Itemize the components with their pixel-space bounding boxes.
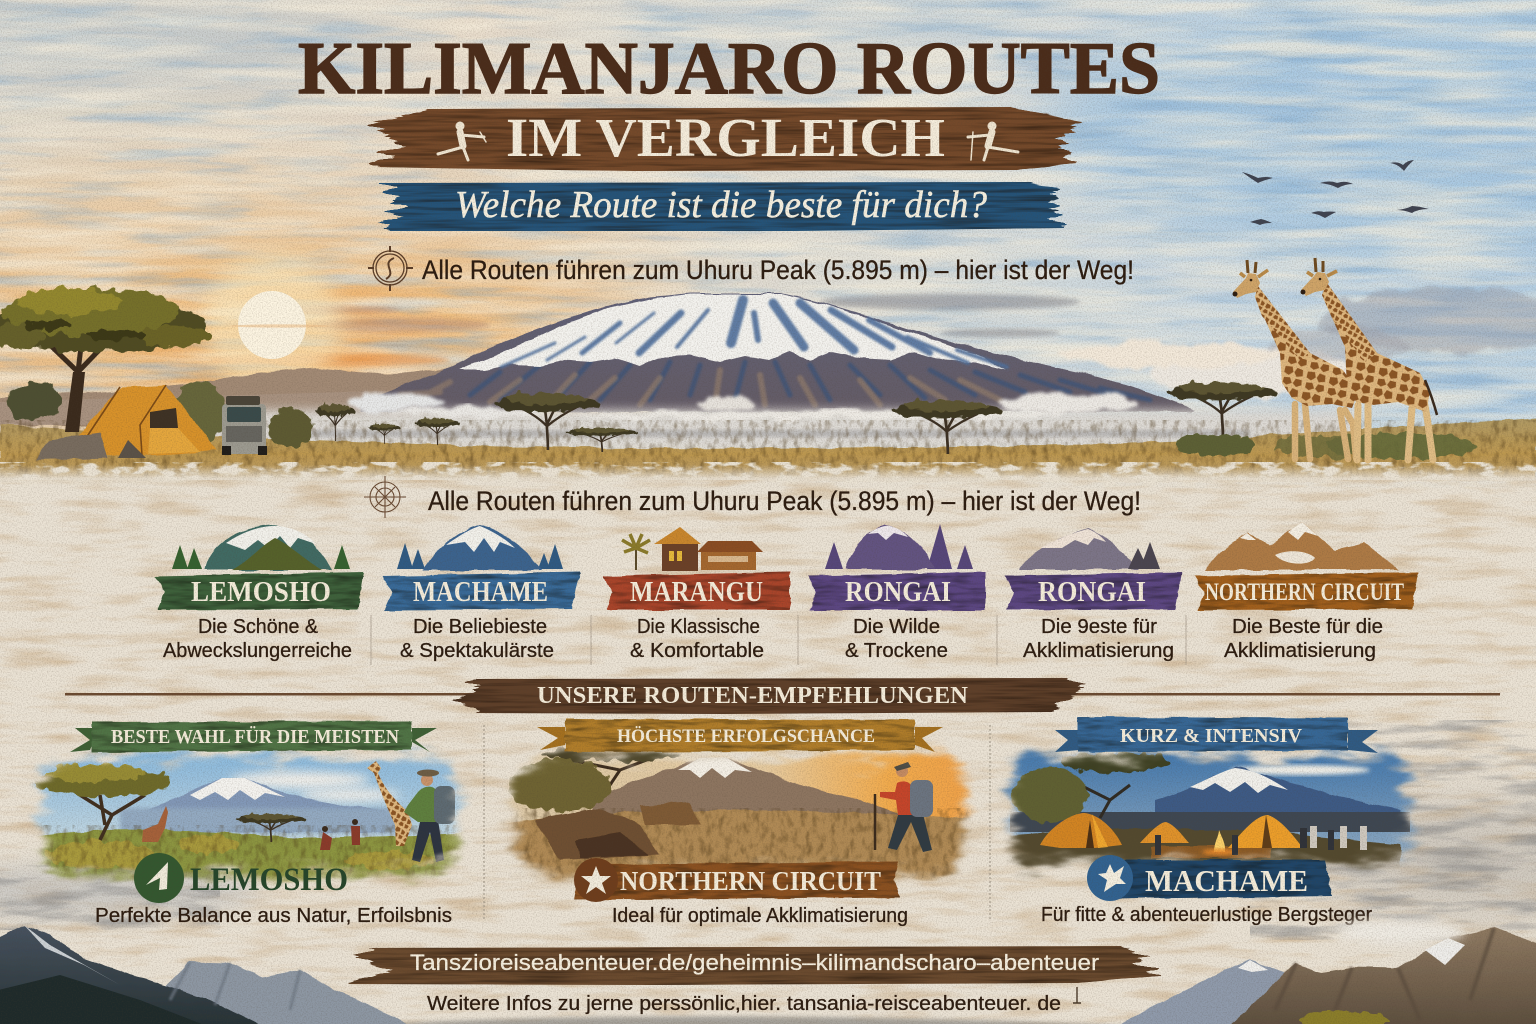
banner: im vergleich [372,107,1084,171]
route: Machame [382,525,580,662]
panel: Lemosho recommendation: LEMOSHO [190,862,348,898]
panel: Machame recommendation: Für fitte & abenteuerlustige Bergsteger [1041,904,1372,926]
giraffe left [1232,260,1358,459]
ribbon [537,727,943,752]
scene: savanna with hiker and giraffe [29,743,471,887]
banner: im vergleich: IM VERGLEICH [506,107,945,168]
route: Lemosho: Abweckslungerreiche [163,640,352,662]
panel: Machame recommendation: KURZ & INTENSIV [1120,725,1303,747]
banner with star [574,862,900,900]
landscape: small acacias [9,382,1281,456]
landscape: big acacia tree [0,288,211,432]
banner: subtitle [384,182,1062,231]
icon: compass top [368,246,413,291]
panel: Lemosho recommendation: Perfekte Balance aus Natur, Erfoilsbnis [95,905,452,927]
parchment lower background [0,480,1536,1024]
icon: tent [36,385,216,460]
small giraffe [367,761,412,846]
route: Marangu: & Komfortable [630,640,764,662]
route: Lemosho [155,525,364,662]
route: Rongai acclimatisation [1005,528,1182,662]
sky background [0,0,1536,520]
hiker [412,820,444,862]
footer link banner [345,946,1150,985]
hiker [874,794,876,850]
icon: safari vehicle [222,396,267,455]
icon: compass lower [364,476,406,518]
panel: Northern Circuit recommendation [490,719,990,927]
route: Rongai wild: RONGAI [845,576,951,608]
scene: hiker at sunset [501,742,979,884]
section heading: recommendations: UNSERE ROUTEN-EMPFEHLUNGEN [537,683,969,709]
landscape: low clouds [190,393,1360,450]
birds [1242,160,1429,225]
route: Rongai wild [808,524,985,662]
panel: Machame recommendation [990,717,1460,926]
tents [1040,813,1122,848]
route: Marangu: MARANGU [630,576,763,608]
landscape: savanna ground [0,418,1536,495]
icon: hiker right [968,122,1018,160]
route: Rongai acclimatisation: Akklimatisierung [1023,640,1174,662]
illustration: bottom mountains [0,920,1536,1024]
banner: subtitle: Welche Route ist die beste für dich? [455,184,987,226]
panel: Northern Circuit recommendation: HÖCHSTE ERFOLGSCHANCE [617,726,875,747]
deer [142,806,168,842]
route: Northern Circuit: NORTHERN CIRCUIT [1205,579,1404,606]
route: Marangu [603,527,790,662]
route: Northern Circuit: Akklimatisierung [1224,640,1376,662]
panel: Machame recommendation: MACHAME [1145,863,1308,898]
panel: Lemosho recommendation [29,720,471,925]
panel: Lemosho recommendation: BESTE WAHL FÜR DIE MEISTEN [111,725,400,748]
route: Northern Circuit [1194,522,1418,662]
footer text: Weitere Infos zu jerne perssönlic,hier. tansania-reisceabenteuer. de [427,993,1061,1015]
footer link banner: Tanszioreiseabenteuer.de/geheimnis–kilimandscharo–abenteuer [410,950,1099,975]
title: KILIMANJARO ROUTES [298,28,1160,110]
panel: Northern Circuit recommendation: Ideal für optimale Akklimatisierung [612,905,908,927]
snow cap [459,294,1005,370]
landscape: Kilimanjaro [360,293,1195,412]
scene: camp at dusk [997,743,1424,880]
ribbon [70,728,437,752]
route: Machame: & Spektakulärste [400,640,554,662]
route: Northern Circuit: Die Beste für die [1232,616,1383,638]
route: Lemosho: LEMOSHO [191,576,331,608]
giraffe right [1300,258,1437,460]
ribbon [1055,730,1378,753]
illustration: giraffes [1232,258,1475,460]
icon: hiker left [438,122,486,160]
route: Rongai acclimatisation: RONGAI [1038,576,1146,608]
route: Marangu: Die Klassische [637,616,760,638]
banner with star [1090,860,1332,899]
icon badge [134,853,184,903]
route: Machame: Die Beliebieste [413,616,547,638]
route: Rongai acclimatisation: Die 9este für [1041,616,1157,638]
route: Rongai wild: Die Wilde [853,616,940,638]
route: Lemosho: Die Schöne & [198,616,319,638]
text: intro line lower: Alle Routen führen zum Uhuru Peak (5.895 m) – hier ist der Weg! [428,486,1141,516]
panel: Northern Circuit recommendation: NORTHERN CIRCUIT [620,866,881,896]
route: Rongai wild: & Trockene [845,640,948,662]
sun [202,255,342,395]
route: Machame: MACHAME [413,576,548,608]
section heading: recommendations [65,678,1500,714]
route cards [155,522,1418,665]
text: intro line top: Alle Routen führen zum Uhuru Peak (5.895 m) – hier ist der Weg! [422,255,1134,285]
landscape: distant hills [0,367,520,425]
